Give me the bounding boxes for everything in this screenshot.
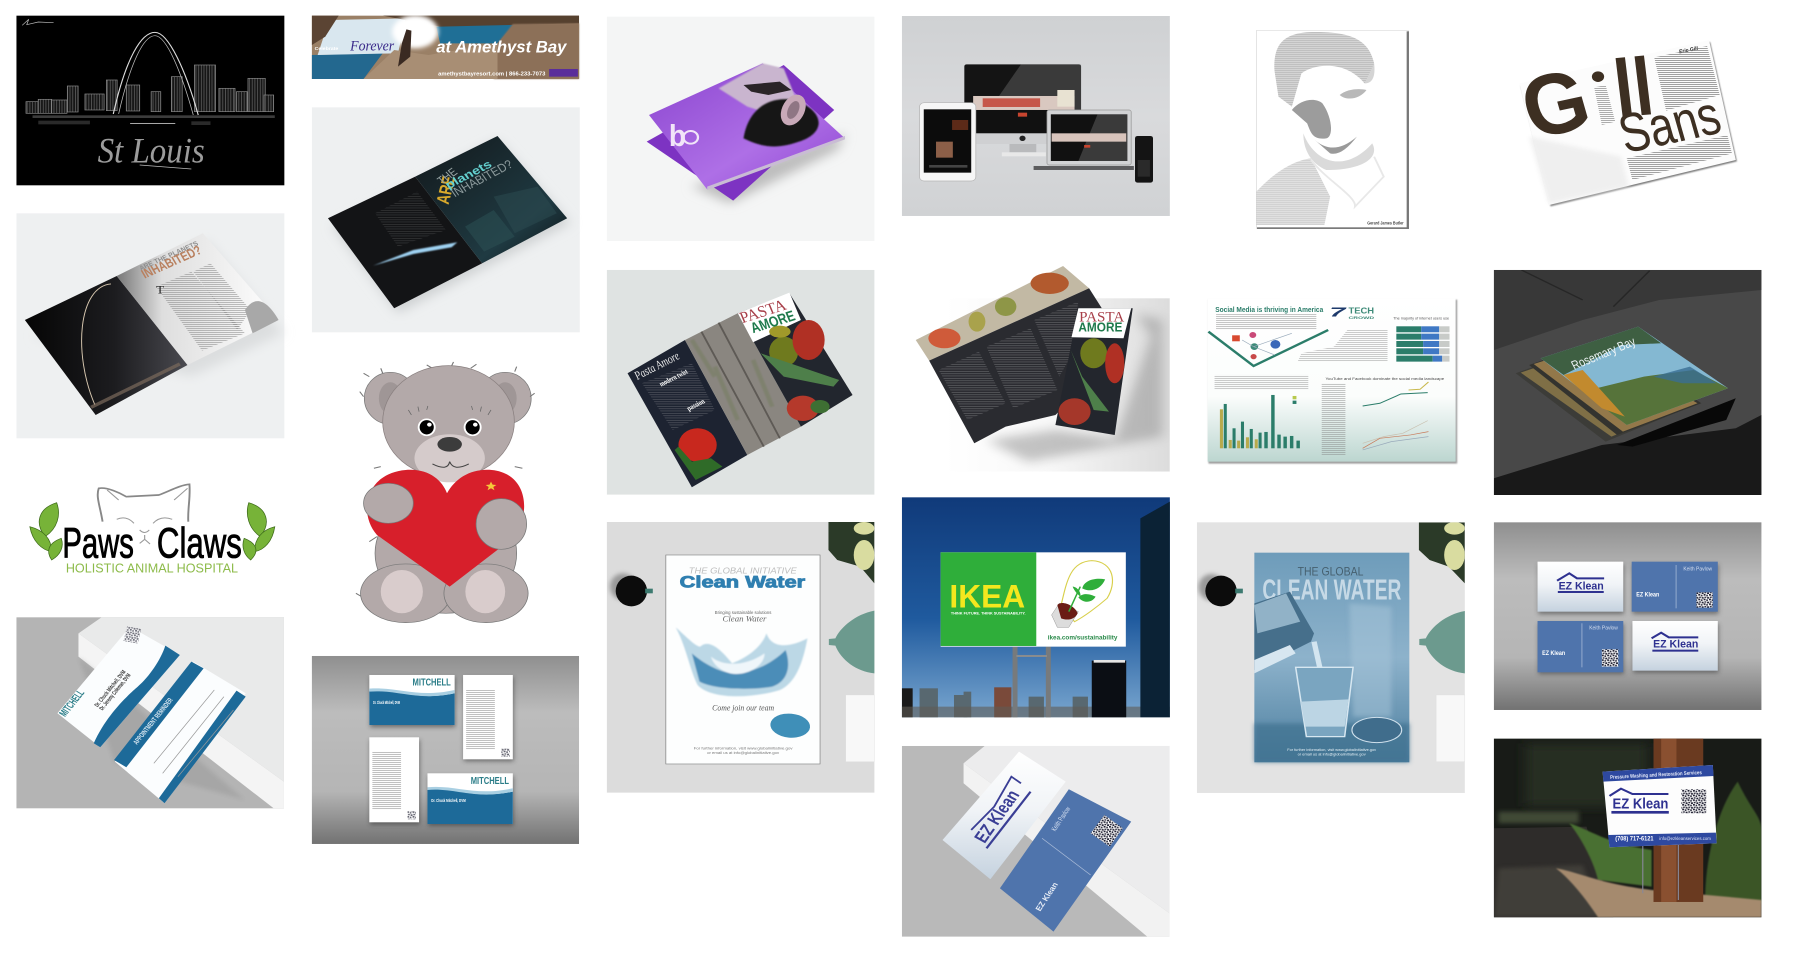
leaves right <box>243 503 275 560</box>
poster sheet <box>666 555 820 764</box>
water glass <box>1314 642 1326 697</box>
right page <box>117 233 279 365</box>
tile: Clean Water poster, blue: CLEAN WATER <box>1262 573 1401 606</box>
notebook <box>846 695 874 762</box>
water splash <box>676 627 807 696</box>
cliff and pool <box>312 16 339 45</box>
tile: Amethyst Bay banner <box>312 15 579 79</box>
blue card <box>1000 789 1131 932</box>
tile: Clean Water poster, blue: or email us at info@globalinitiative.gov <box>1298 752 1366 757</box>
tile: purple booklet <box>607 17 874 241</box>
tile: Gill Sans type spread <box>1511 40 1737 206</box>
cover title: PASTA <box>1079 310 1125 325</box>
bear ears <box>364 372 416 424</box>
tile: IKEA billboard: ikea.com/sustainability <box>1048 634 1117 642</box>
tile: Mitchell stationery flat lay: MITCHELL <box>413 677 451 688</box>
white card with logo: EZ Klean <box>1653 637 1698 650</box>
flowers <box>1419 522 1465 583</box>
paving above slab <box>1494 270 1761 350</box>
front booklet cover <box>1541 327 1728 425</box>
tomato and herbs <box>678 428 717 462</box>
tile: EZ Klean yard sign: Pressure Washing and Restoration Services <box>1610 770 1702 781</box>
food photo strip <box>916 266 1089 361</box>
tile: Pasta Amore brochure outside: Pasta Amore <box>630 349 682 383</box>
tile: Clean Water poster, white: Clean Water <box>680 572 805 591</box>
platform bars: The majority of internet users use <box>1393 316 1450 320</box>
ledge <box>78 617 284 782</box>
tile: travel booklets on slate <box>1494 270 1761 495</box>
intro paragraph <box>1298 330 1388 362</box>
gravel <box>1556 868 1761 917</box>
tile: Mitchell cards on a ledge: APPOINTMENT REMINDER <box>132 696 175 746</box>
tile: Gill Sans type spread: Sans <box>1612 83 1727 165</box>
tile: EZ Klean cards on a ledge: EZ Klean <box>970 787 1024 846</box>
tile: teddy bear with heart <box>356 362 535 623</box>
wooden pole <box>1653 739 1703 902</box>
model with headphones <box>719 63 795 113</box>
text panel <box>628 340 747 487</box>
tile: planets magazine, dark spread <box>312 107 580 332</box>
tile: Pasta Amore brochure outside: AMORE <box>748 308 798 337</box>
reminder card back <box>463 675 513 759</box>
card shadows <box>370 677 514 826</box>
face shading <box>1292 100 1331 139</box>
billboard <box>941 552 1126 647</box>
blue card with QR: EZ Klean <box>1542 650 1565 657</box>
cat outline <box>98 484 190 522</box>
card: front <box>57 627 180 747</box>
teapot <box>1419 611 1465 673</box>
right page <box>415 136 567 263</box>
desktop monitor <box>964 64 1081 133</box>
tile: Mitchell stationery flat lay: Dr. Chuck Mitchell, DVM <box>431 798 466 803</box>
tile: Amethyst Bay banner: Celebrate <box>315 46 339 52</box>
flowers <box>828 522 874 583</box>
card shadows <box>1538 564 1719 674</box>
tile: Clean Water poster, white: For further information, visit www.globalinitiative.gov <box>694 746 793 750</box>
logo oval <box>1352 717 1402 743</box>
white card with logo: EZ Klean <box>1559 579 1604 592</box>
dark towers <box>1092 661 1126 717</box>
inside menu panels <box>929 288 1126 443</box>
article heading: ARE THE PLANETS <box>138 240 200 272</box>
platform bars <box>1393 316 1450 362</box>
poster heading: THE GLOBAL <box>1298 564 1363 578</box>
tile: social media infographic: TECH <box>1348 306 1374 315</box>
tile: planets magazine, light spread: T <box>156 283 165 296</box>
bushes <box>1705 782 1761 903</box>
poster heading: THE GLOBAL INITIATIVE <box>689 566 797 575</box>
tile: EZ Klean yard sign: EZ Klean <box>1613 796 1668 812</box>
tile: planets magazine, dark spread: THE <box>434 165 460 187</box>
white card <box>943 752 1066 879</box>
bear fur tufts <box>356 362 535 597</box>
stacked booklets <box>1516 348 1675 442</box>
tile: Pasta Amore brochure outside <box>607 270 874 495</box>
tile: Paws and Claws logo: Claws <box>157 518 242 567</box>
soft shadow <box>987 313 1163 462</box>
jacket <box>1256 158 1330 225</box>
tablet <box>920 103 976 181</box>
hair <box>1274 32 1375 107</box>
gateway arch <box>113 32 198 115</box>
billboard posts <box>1013 647 1018 717</box>
bear head <box>383 366 514 478</box>
tech logo: 7 <box>1329 305 1348 319</box>
tile: planets magazine, dark spread: planets <box>442 157 495 192</box>
signature <box>22 19 54 25</box>
business card front <box>427 773 513 824</box>
tile: Mitchell stationery flat lay: Dr. Chuck Mitchell, DVM <box>373 700 400 705</box>
tile: planets magazine, light spread: INHABITED? <box>139 243 204 281</box>
laptop <box>1047 110 1131 165</box>
coffee cup <box>1198 574 1224 601</box>
tile: Gill Sans type spread: ll <box>1609 40 1658 135</box>
logotype: Paws <box>62 518 134 567</box>
tile: Clean Water poster, white: Clean Water <box>722 614 767 623</box>
tile: Mitchell cards on a ledge: Dr. Chuck Mitchell, DVM <box>93 669 128 708</box>
couple <box>398 29 411 67</box>
blue card with QR <box>1538 621 1623 672</box>
tile: EZ Klean card set <box>1494 522 1761 710</box>
tile: Mitchell cards on a ledge: MITCHELL <box>57 688 88 719</box>
article text columns <box>156 272 245 351</box>
light bulb with seedling <box>1061 561 1113 622</box>
bear eyes and nose <box>419 419 435 435</box>
tile: Mitchell stationery flat lay <box>312 656 579 844</box>
tile: Mitchell cards on a ledge: Dr. Jeremy Coleman, DVM <box>98 672 133 712</box>
ledge <box>964 746 1169 913</box>
shadow under slab <box>1494 415 1761 495</box>
script title: St Louis <box>98 131 205 171</box>
tile: planets magazine, light spread <box>16 213 284 438</box>
reminder card back <box>369 737 419 822</box>
tile: Pasta Amore brochure inside: AMORE <box>1078 320 1122 334</box>
tile: EZ Klean yard sign <box>1494 739 1761 917</box>
tile: Clean Water poster, white: or email us at info@globalinitiative.gov <box>707 750 780 755</box>
tile: Clean Water poster, blue: For further information, visit www.globalinitiative.gov <box>1287 747 1377 752</box>
tile: social media infographic: CROWD <box>1348 315 1374 320</box>
food panel <box>738 293 853 427</box>
blue card with QR: EZ Klean <box>1636 592 1659 599</box>
lower booklet <box>647 65 834 201</box>
left page <box>328 177 482 308</box>
jug <box>1254 592 1314 670</box>
notebook <box>1436 695 1465 762</box>
tile: Pasta Amore brochure inside <box>916 266 1170 472</box>
white card with logo <box>1632 621 1718 671</box>
glowing ship <box>373 242 457 266</box>
bear body and legs <box>375 493 517 613</box>
green chevron with icons <box>1208 330 1328 366</box>
tile: Pasta Amore brochure outside: passion <box>685 397 707 413</box>
coffee cup <box>610 573 636 600</box>
tile: EZ Klean cards on a ledge <box>902 746 1169 937</box>
tile: Mitchell stationery flat lay: MITCHELL <box>471 776 509 787</box>
tile: typographic portrait <box>1256 31 1409 229</box>
caption: Gerard James Butler <box>1367 221 1404 226</box>
booklet title: Rosemary Bay <box>1569 334 1638 372</box>
tile: Pasta Amore brochure outside: modern twist <box>657 367 690 388</box>
tile: Amethyst Bay banner: amethystbayresort.com | 866-233-7073 <box>438 72 545 77</box>
tile: EZ Klean cards on a ledge: Keith Pavlow <box>1050 805 1073 833</box>
wood panel <box>685 313 801 455</box>
tile: EZ Klean yard sign: (708) 717-6121 <box>1615 835 1654 842</box>
tile: Clean Water poster, white <box>607 522 874 793</box>
upper booklet <box>649 63 845 189</box>
tile: IKEA billboard: IKEA <box>949 579 1025 615</box>
tile: EZ Klean cards on a ledge: EZ Klean <box>1034 881 1060 913</box>
tile: Mitchell cards on a ledge <box>16 617 284 808</box>
white card with logo <box>1538 562 1623 612</box>
infographic heading: Social Media is thriving in America <box>1215 305 1324 314</box>
left page <box>25 276 188 415</box>
biography text: Eric Gill <box>1679 46 1699 55</box>
trees and road <box>1525 743 1648 807</box>
teapot <box>829 611 874 673</box>
call to action: Come join our team <box>712 703 774 712</box>
planet <box>245 301 279 333</box>
bar chart <box>1215 375 1308 448</box>
line charts <box>1322 376 1445 455</box>
tile: Paws and Claws logo <box>30 484 275 576</box>
skyline buildings <box>26 65 274 113</box>
city skyline <box>920 688 1088 717</box>
red heart <box>367 470 524 587</box>
tile: social media infographic <box>1208 298 1457 464</box>
blue card with QR: Keith Pavlow <box>1683 566 1713 573</box>
tile: Clean Water poster, blue <box>1197 522 1465 793</box>
tile: Amethyst Bay banner: at Amethyst Bay <box>436 38 567 56</box>
card: appointment reminder <box>115 662 246 803</box>
tile: responsive website mockup <box>902 16 1170 216</box>
brochure title: PASTA <box>737 296 789 327</box>
phone <box>1135 136 1153 183</box>
tile: Clean Water poster, white: Bringing sustainable solutions <box>715 610 772 615</box>
article columns <box>465 210 515 252</box>
blue card with QR <box>1632 562 1718 612</box>
tile: planets magazine, dark spread: INHABITED? <box>448 157 515 200</box>
leaves left <box>30 503 62 560</box>
bear paws <box>364 483 413 523</box>
tile: EZ Klean yard sign: info@ezkleanservices.com <box>1659 836 1711 841</box>
tile: IKEA billboard <box>902 497 1170 717</box>
line charts: YouTube and Facebook dominate the social media landscape <box>1326 376 1445 381</box>
booklet logo: b <box>669 118 686 152</box>
giant title: G <box>1511 50 1600 157</box>
yard sign <box>1603 765 1717 847</box>
banner copy: Forever <box>349 39 395 54</box>
tagline: HOLISTIC ANIMAL HOSPITAL <box>66 562 238 576</box>
blue card with QR: Keith Pavlow <box>1589 625 1618 631</box>
article heading: ARE <box>432 174 459 206</box>
poster sheet <box>1254 553 1409 762</box>
folded cover <box>1055 308 1133 435</box>
business card front <box>369 675 455 725</box>
tile: St Louis skyline poster <box>16 16 284 185</box>
tile: IKEA billboard: THINK FUTURE. THINK SUSTAINABILITY. <box>951 612 1026 616</box>
